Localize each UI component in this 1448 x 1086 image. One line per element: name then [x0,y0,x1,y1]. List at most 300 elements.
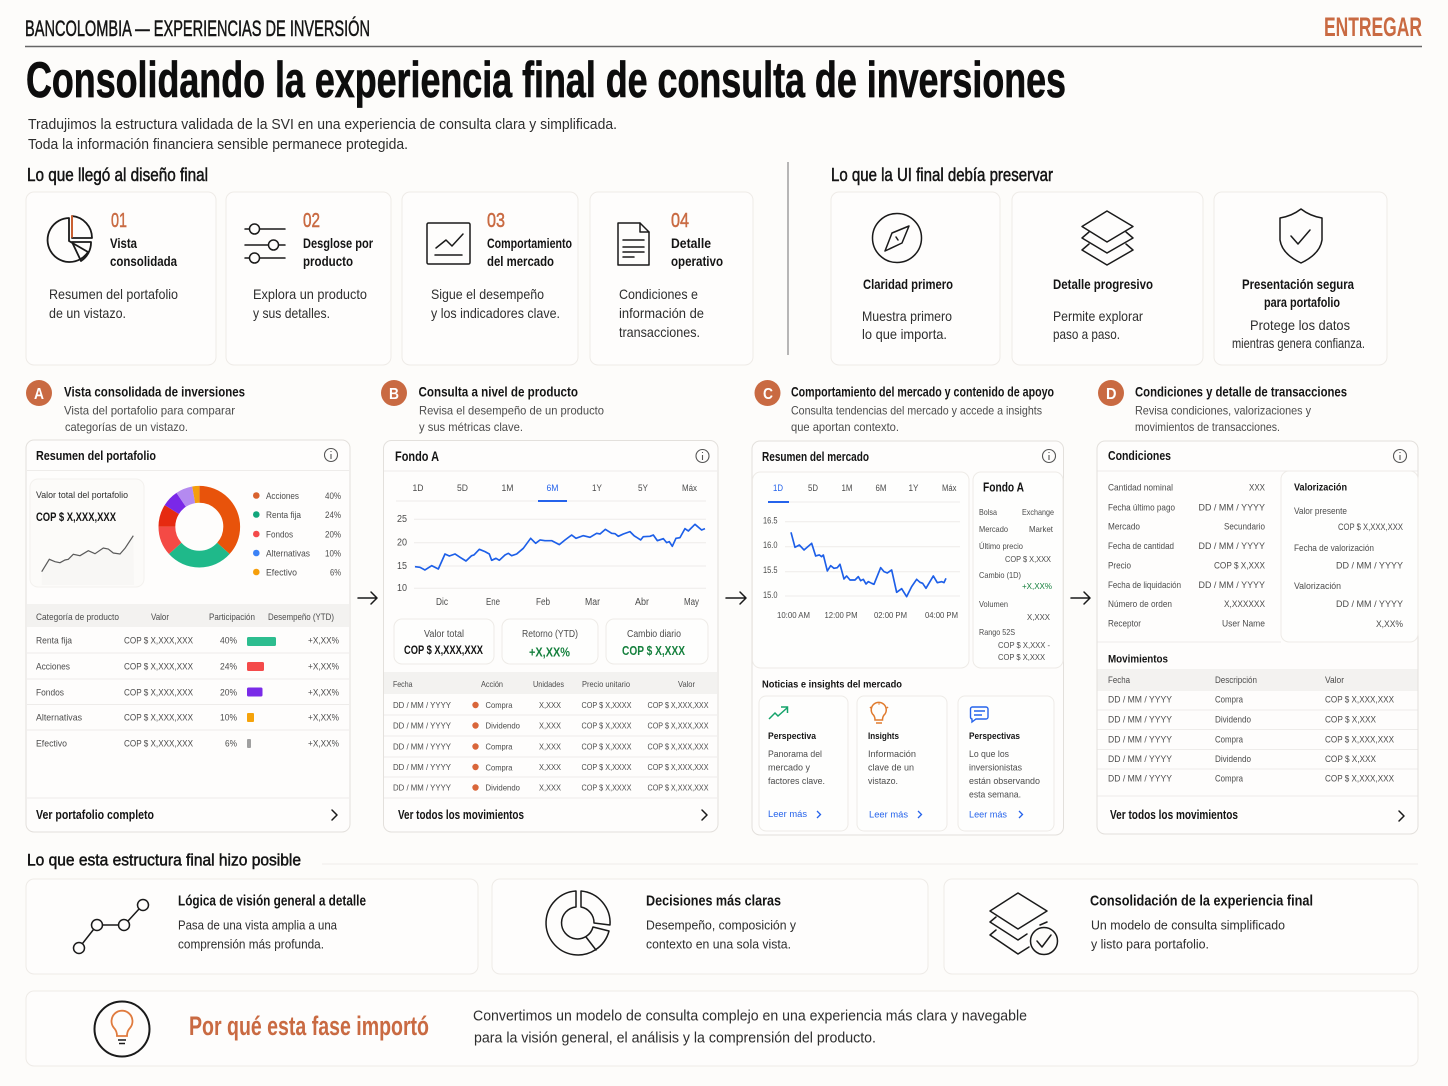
fund detail card: X,XXX [1027,612,1050,622]
movements table: COP $ X,XXX,XXX [648,742,709,752]
card 04 [590,192,753,365]
card: presentación segura: Protege los datos [1250,317,1350,333]
movements table: Dividendo [486,720,520,730]
section A heading: Vista consolidada de inversiones [64,384,245,400]
section B heading: Revisa el desempeño de un producto [419,404,604,418]
section A heading [26,380,245,434]
news card: perspectivas: inversionistas [969,762,1022,772]
total value card [30,479,144,587]
movements table: Compra [1215,694,1243,704]
time tabs: 1M [502,483,514,494]
fund detail card: Cambio (1D) [979,570,1021,580]
line chart: 20 [397,538,407,548]
conditions list: Mercado [1108,522,1140,532]
footer link: Ver portafolio completo [36,808,154,822]
movements table: Valor [678,679,695,689]
benefit card: consolidación: Un modelo de consulta simplificado [1091,918,1285,932]
category table: +X,XX% [308,738,339,750]
card 03: 03 [487,210,505,232]
callout: por qué esta fase importó: Convertimos un modelo de consulta complejo en una experiencia más clara y navegable [473,1008,1027,1024]
metric: valor total: Valor total [424,629,464,640]
category table: +X,XX% [308,688,339,698]
section D heading: Revisa condiciones, valorizaciones y [1135,404,1311,418]
card 04: Detalle [671,235,711,251]
benefit card: consolidación: Consolidación de la experiencia final [1090,892,1313,910]
movements table: Fecha [393,679,413,689]
icon: shield [1280,209,1322,263]
card 01: Resumen del portafolio [49,286,178,302]
donut legend [253,491,341,578]
movements table: COP $ X,XXXX [582,720,632,730]
total value card: COP $ X,XXX,XXX [36,510,116,524]
category table: Valor [151,612,169,623]
news card: insights: Leer más [869,810,908,820]
icon: info [1042,450,1056,462]
benefit card: consolidación: y listo para portafolio. [1091,936,1209,952]
card: claridad primero [831,192,1000,365]
section C heading: Consulta tendencias del mercado y accede a insights [791,404,1042,418]
movements table: X,XXX [539,700,561,710]
time tabs: 5D [457,483,468,494]
section A heading: categorías de un vistazo. [65,420,188,434]
panel C: resumen del mercado: Resumen del mercado [762,449,869,464]
valuation card: Fecha de valorización [1294,543,1374,553]
card 03 [402,192,578,365]
fund detail card: Volumen [979,599,1008,609]
market chart card: 5D [808,483,818,493]
news card: perspectivas: están observando [969,776,1040,786]
metric: retorno: Retorno (YTD) [522,629,578,640]
movements table: DD / MM / YYYY [393,700,451,710]
section C heading: C [763,386,773,403]
arrow A to B [358,592,377,604]
card 02: 02 [303,210,320,232]
fund detail card: COP $ X,XXX - [998,640,1050,650]
metric: valor total: COP $ X,XXX,XXX [404,643,483,657]
benefit card: decisiones: Decisiones más claras [646,892,781,910]
callout: por qué esta fase importó: para la visión general, el análisis y la comprensión del producto. [474,1030,876,1046]
intro text [28,117,617,153]
heading: lo que esta estructura hizo posible: Lo que esta estructura final hizo posible [27,850,301,870]
category table: Fondos [36,688,64,698]
metric: cambio diario [606,619,708,664]
market chart card: 6M [876,483,886,493]
movements table: COP $ X,XXX,XXX [648,700,709,710]
fund detail card: Bolsa [979,507,997,517]
donut legend: Efectivo [266,568,297,578]
card 03: Comportamiento [487,235,572,251]
movements table: X,XXX [539,742,561,752]
card 02 [226,192,391,365]
benefit card: decisiones: contexto en una sola vista. [646,936,791,952]
category table: 20% [220,688,237,698]
conditions list: Secundario [1224,522,1265,532]
time tabs: 1D [412,483,424,494]
movements table: COP $ X,XXXX [582,700,632,710]
icon: compass [872,214,922,262]
panel B: fondo A [384,440,718,832]
panel D: condiciones [1097,441,1418,834]
news card: perspectivas: esta semana. [969,790,1021,800]
fund detail card: Fondo A [983,480,1024,494]
market chart card: 02:00 PM [874,610,907,620]
section D heading: D [1106,386,1116,403]
market chart card: 15.5 [763,565,778,576]
market chart card: 15.0 [763,590,778,601]
header bar [25,12,1422,46]
news card: insights: vistazo. [868,776,898,786]
movements table: Dividendo [486,782,520,792]
movements table: Compra [1215,774,1243,784]
movements table: Descripción [1215,675,1257,685]
movements table: COP $ X,XXX,XXX [648,782,709,792]
fund detail card: +X,XX% [1022,581,1052,591]
section B heading: B [389,386,399,403]
conditions list: User Name [1222,618,1265,628]
section B heading: y sus métricas clave. [419,420,523,434]
conditions list: Precio [1108,560,1131,570]
movements table: COP $ X,XXX,XXX [648,762,709,772]
title: Consolidando la experiencia final de consulta de inversiones [26,52,1066,108]
conditions list: DD / MM / YYYY [1198,580,1265,590]
movements table: DD / MM / YYYY [393,762,451,772]
news card: perspectiva: Panorama del [768,749,822,759]
donut legend: Alternativas [266,548,310,560]
section B heading: Consulta a nivel de producto [418,384,578,400]
movements table: COP $ X,XXX [1325,754,1376,764]
valuation card: Valorización [1294,482,1347,494]
icon: lightbulb [870,702,888,723]
movements table: DD / MM / YYYY [393,720,451,730]
benefit card: lógica [26,879,478,974]
market chart card: 1D [773,483,783,493]
conditions list [1108,482,1265,628]
movements table: COP $ X,XXXX [582,742,632,752]
section C heading: Comportamiento del mercado y contenido de apoyo [791,384,1054,400]
card 01: consolidada [110,253,177,269]
benefit card: decisiones: Desempeño, composición y [646,918,796,932]
conditions list: Fecha de liquidación [1108,580,1181,590]
donut legend: 24% [325,510,341,521]
card 02: Desglose por [303,235,373,251]
news card: insights [857,696,947,831]
card 04: información de [619,305,704,321]
section D heading [1098,380,1347,434]
movements table: Compra [486,762,513,772]
category table: Participación [209,612,255,623]
card 04: operativo [671,253,723,269]
movements table: DD / MM / YYYY [1108,774,1172,784]
market chart card: 12:00 PM [824,610,858,620]
section A heading: Vista del portafolio para comparar [64,404,235,418]
news card: perspectiva [759,696,848,831]
market chart card: 10:00 AM [777,610,810,620]
callout: por qué esta fase importó [26,991,1418,1066]
movements table: Valor [1325,675,1344,685]
category table: +X,XX% [308,712,339,724]
movements table: DD / MM / YYYY [1108,734,1172,744]
section B heading [381,380,604,434]
market chart card: 1Y [908,483,918,493]
news card: insights: clave de un [868,762,914,772]
fund detail card: Último precio [979,541,1023,551]
valuation card: DD / MM / YYYY [1336,599,1403,609]
icon: layers [1082,211,1133,265]
conditions list: Número de orden [1108,599,1172,609]
fund detail card [973,472,1063,668]
metric: retorno [502,619,598,664]
card: presentación segura: mientras genera confianza. [1232,335,1365,351]
card: presentación segura [1214,192,1387,365]
news card: perspectiva: Leer más [768,809,807,820]
card: claridad primero: lo que importa. [862,326,947,342]
news card: perspectivas [958,696,1054,831]
card 02: y sus detalles. [253,305,330,321]
line chart: Mar [585,597,601,608]
icon: info [696,450,709,462]
movements table: DD / MM / YYYY [1108,754,1172,764]
news card: perspectiva: mercado y [768,762,810,772]
news card: perspectivas: Leer más [969,810,1007,820]
donut legend: 6% [330,568,341,578]
section D heading: Condiciones y detalle de transacciones [1135,384,1347,400]
callout: por qué esta fase importó: Por qué esta fase importó [189,1011,429,1041]
donut legend: Fondos [266,530,293,540]
card 04: transacciones. [619,324,700,340]
movements table: Dividendo [1215,714,1251,724]
benefit card: decisiones [492,879,928,974]
category table: Efectivo [36,738,67,750]
movements table: X,XXX [539,720,561,730]
movements table: Compra [486,700,513,710]
card: claridad primero: Claridad primero [863,276,953,292]
movements table: COP $ X,XXX,XXX [1325,694,1394,704]
movements table: Compra [486,742,513,752]
category table: 40% [220,636,237,646]
icon: pie chart [48,216,92,262]
section C heading: que aportan contexto. [791,420,899,434]
card: claridad primero: Muestra primero [862,308,952,324]
conditions list: DD / MM / YYYY [1198,502,1265,512]
card: detalle progresivo [1012,192,1203,365]
icon: line chart [427,223,470,264]
footer link [27,798,349,822]
line chart: Dic [436,597,448,608]
card 03: Sigue el desempeño [431,286,544,302]
conditions list: Cantidad nominal [1108,482,1173,492]
movements table: Unidades [533,679,564,689]
panel C: resumen del mercado [752,441,1064,835]
category table: 6% [225,738,237,750]
benefit card: lógica: comprensión más profunda. [178,936,324,952]
line chart: 15 [397,561,407,572]
category table: 24% [220,662,237,672]
donut chart [167,494,232,559]
icon: info [324,448,338,462]
arrow B to C [726,592,746,604]
conditions list: Fecha último pago [1108,502,1175,512]
fund detail card: Market [1029,524,1054,534]
card: presentación segura: Presentación segura [1242,276,1354,292]
movements table: DD / MM / YYYY [1108,694,1172,704]
card 01: de un vistazo. [49,305,126,321]
card: detalle progresivo: Detalle progresivo [1053,276,1153,292]
footer link [1098,796,1418,822]
card 01 [26,192,216,365]
market chart card [752,472,969,668]
time tabs: 6M [546,483,559,494]
category table: 10% [220,712,237,724]
movements table: COP $ X,XXXX [582,782,632,792]
donut legend: 20% [325,530,341,540]
conditions list: X,XXXXXX [1224,599,1265,609]
icon: document [618,223,649,265]
heading: lo que la UI debía preservar: Lo que la UI final debía preservar [831,165,1053,185]
total value card: Valor total del portafolio [36,490,128,501]
fund detail card: Exchange [1022,507,1054,517]
section A heading: A [34,386,44,403]
movements table: Fecha [1108,675,1130,685]
market chart card: 16.0 [763,540,778,551]
valuation card: DD / MM / YYYY [1336,560,1403,570]
icon: donut chart [546,891,610,955]
icon: lightbulb in circle [94,1002,150,1056]
icon: chat bubble [970,707,988,722]
category table: COP $ X,XXX,XXX [124,712,194,724]
card 03: del mercado [487,253,554,269]
valuation card [1281,471,1418,642]
metric: cambio diario: Cambio diario [627,629,681,640]
movements table: Acción [481,679,503,689]
news card: perspectivas: Lo que los [969,749,1009,759]
movements table [384,672,717,792]
time tabs: 1Y [592,483,603,494]
time tabs: Máx [682,483,697,494]
category table: COP $ X,XXX,XXX [124,688,194,698]
fund detail card: Mercado [979,524,1008,534]
line chart: 25 [397,514,407,525]
valuation card: X,XX% [1376,619,1403,629]
benefit card: lógica: Lógica de visión general a detalle [178,892,366,910]
movements table: DD / MM / YYYY [393,782,451,792]
movements table: COP $ X,XXX,XXX [648,720,709,730]
category table: Desempeño (YTD) [268,612,334,623]
intro text: Toda la información financiera sensible permanece protegida. [28,137,408,153]
fund detail card: COP $ X,XXX [1005,554,1051,564]
movements table: COP $ X,XXX,XXX [1325,734,1394,744]
conditions list: XXX [1249,482,1265,492]
fund detail card: COP $ X,XXX [998,652,1045,662]
news card: perspectiva: factores clave. [768,776,825,786]
movements table: Compra [1215,734,1243,744]
benefit card: consolidación [944,879,1418,974]
card 02: Explora un producto [253,286,367,302]
movements table: COP $ X,XXX [1325,714,1376,724]
footer link: Ver todos los movimientos [398,808,524,822]
icon: connected nodes [74,900,148,954]
category table: Renta fija [36,636,73,646]
panel A: resumen del portafolio: Resumen del portafolio [36,448,156,463]
fund detail card: Rango 52S [979,627,1015,637]
movements table: X,XXX [539,782,561,792]
panel A: resumen del portafolio [26,440,350,832]
card: detalle progresivo: paso a paso. [1053,326,1120,342]
card 03: y los indicadores clave. [431,305,560,321]
card 04: Condiciones e [619,286,698,302]
benefit card: lógica: Pasa de una vista amplia a una [178,918,338,932]
category table: +X,XX% [308,662,339,672]
metric: cambio diario: COP $ X,XXX [622,644,686,658]
card 01: Vista [110,235,137,251]
valuation card: Valorización [1294,581,1341,591]
line chart: Abr [635,597,650,608]
section C heading [754,380,1054,434]
icon: layers with check [990,893,1058,954]
card: presentación segura: para portafolio [1264,294,1340,310]
movements table: DD / MM / YYYY [393,742,451,752]
market chart card: 1M [842,483,852,493]
metric: valor total [394,619,494,664]
conditions list: Fecha de cantidad [1108,541,1174,551]
header bar: BANCOLOMBIA — EXPERIENCIAS DE INVERSIÓN [25,16,370,41]
donut legend: Renta fija [266,510,302,521]
card 04: 04 [671,210,689,232]
movements table: Precio unitario [582,679,630,689]
category table: Categoría de producto [36,612,119,623]
category table [27,604,349,750]
intro text: Tradujimos la estructura validada de la SVI en una experiencia de consulta clara y simplificada. [28,117,617,133]
category table: COP $ X,XXX,XXX [124,738,194,750]
movements heading: Movimientos [1108,654,1168,666]
icon: info [1394,450,1406,462]
icon: sliders [245,224,285,263]
conditions list: Receptor [1108,618,1141,628]
panel B: fondo A: Fondo A [395,448,439,464]
donut legend: Acciones [266,491,299,502]
movements table: Dividendo [1215,754,1251,764]
section D heading: movimientos de transacciones. [1135,420,1280,434]
panel D: condiciones: Condiciones [1108,449,1171,463]
footer link: Ver todos los movimientos [1110,808,1238,822]
time tabs: 5Y [638,483,649,494]
market chart card: 04:00 PM [925,610,958,620]
donut legend: 40% [325,491,341,502]
conditions list: COP $ X,XXX [1214,560,1265,570]
valuation card: COP $ X,XXX,XXX [1338,522,1403,532]
movements table: COP $ X,XXX,XXX [1325,774,1394,784]
movements table: DD / MM / YYYY [1108,714,1172,724]
market chart card: 16.5 [763,516,778,526]
line chart: 10 [397,583,407,594]
news card: insights: Información [868,749,916,759]
line chart [397,514,706,608]
card 02: producto [303,253,353,269]
line chart: Ene [486,597,500,608]
market chart card: Máx [942,483,957,493]
movements table: X,XXX [539,762,561,772]
news card: perspectivas: Perspectivas [969,731,1020,742]
category table: Acciones [36,662,70,672]
category table: COP $ X,XXX,XXX [124,662,194,672]
movements table: COP $ X,XXXX [582,762,632,772]
conditions list: DD / MM / YYYY [1198,541,1265,551]
card: detalle progresivo: Permite explorar [1053,308,1143,324]
category table: COP $ X,XXX,XXX [124,636,194,646]
news card: perspectiva: Perspectiva [768,731,817,742]
line chart: May [684,597,699,608]
time tabs [396,483,706,502]
metric: retorno: +X,XX% [529,644,570,660]
